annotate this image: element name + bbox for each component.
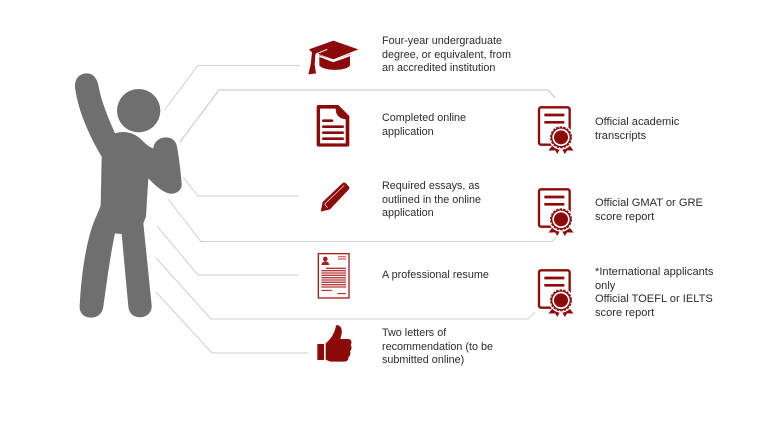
text: transcripts — [595, 116, 679, 142]
person silhouette — [75, 73, 182, 318]
text: online application — [382, 112, 466, 138]
text: GMAT or GRE: Official GMAT or GRE — [595, 197, 703, 209]
text: degree requirement: Four-year undergraduate — [382, 35, 502, 47]
text: degree requirement: degree, or equivalent, from — [382, 48, 511, 60]
connector: degree — [164, 66, 300, 110]
icon: certificate 1 — [539, 107, 574, 155]
icon: certificate 2 — [539, 189, 574, 237]
text: essays: application — [382, 207, 434, 219]
text: online application: application — [382, 126, 434, 138]
text: degree requirement — [382, 35, 511, 74]
connector: essays — [183, 177, 299, 196]
text: online application: Completed online — [382, 112, 466, 124]
text: recommendation letters: recommendation (to be — [382, 340, 493, 352]
text: transcripts: transcripts — [595, 130, 646, 142]
connector: resume — [157, 226, 299, 275]
text: recommendation letters — [382, 327, 493, 366]
text: GMAT or GRE: score report — [595, 210, 654, 222]
text: TOEFL or IELTS: *International applicants — [595, 266, 713, 278]
text: TOEFL or IELTS: Official TOEFL or IELTS — [595, 293, 713, 305]
text: resume: A professional resume — [382, 269, 489, 281]
text: essays — [382, 180, 481, 219]
text: recommendation letters: submitted online) — [382, 354, 464, 366]
icon: pencil — [321, 183, 349, 212]
text: GMAT or GRE — [595, 197, 703, 222]
connector: recommendation — [156, 292, 308, 353]
text: TOEFL or IELTS — [595, 266, 713, 318]
text: degree requirement: an accredited institution — [382, 62, 495, 74]
icon: graduation cap — [308, 41, 358, 74]
text: TOEFL or IELTS: score report — [595, 306, 654, 318]
connector: TOEFL — [156, 258, 535, 319]
text: transcripts: Official academic — [595, 116, 679, 128]
connector lines — [156, 66, 556, 353]
text: essays: outlined in the online — [382, 194, 481, 206]
icon: document — [317, 105, 349, 147]
icon: resume — [318, 254, 349, 298]
text: recommendation letters: Two letters of — [382, 327, 446, 339]
connector: GMAT — [168, 199, 556, 242]
icon: thumbs up — [317, 325, 351, 362]
text: essays: Required essays, as — [382, 180, 480, 192]
icon: certificate 3 — [539, 270, 574, 318]
text: TOEFL or IELTS: only — [595, 280, 615, 292]
connector: transcripts — [180, 90, 555, 142]
